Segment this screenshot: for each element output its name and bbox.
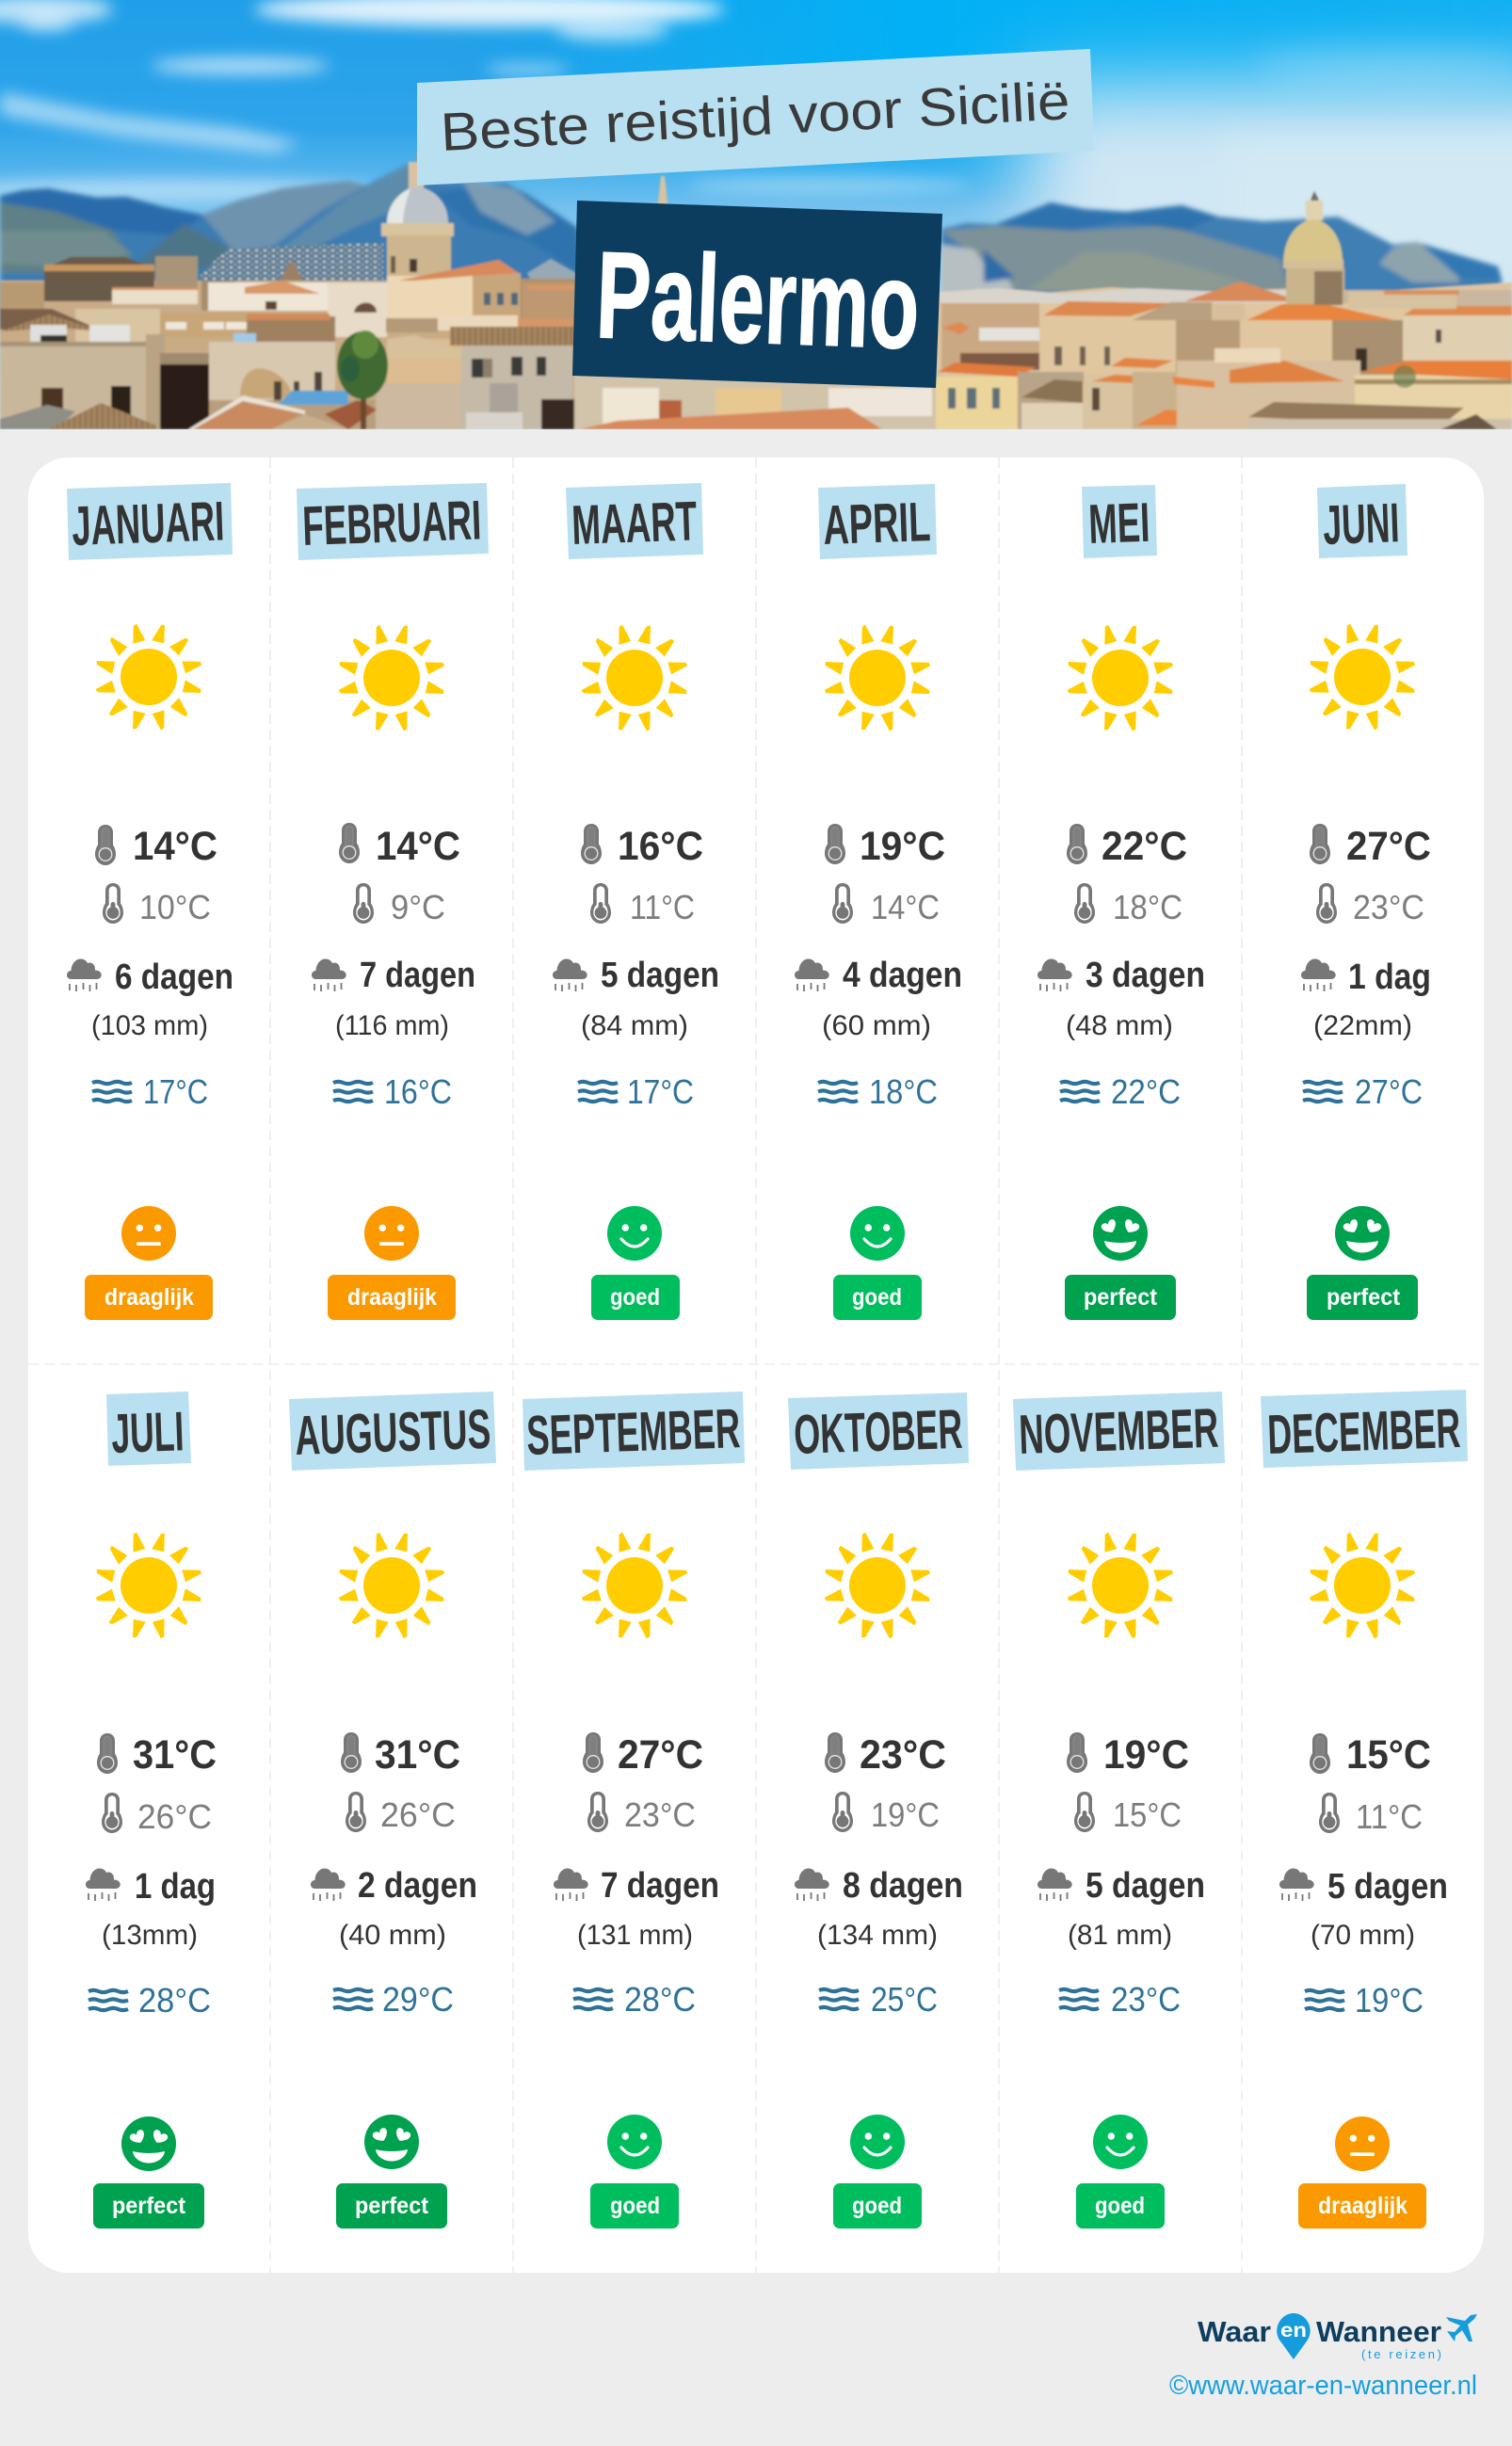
sea temperature: 23°C <box>1111 1980 1181 2019</box>
low temperature: 15°C <box>1113 1795 1182 1834</box>
high temperature: 15°C <box>1346 1732 1431 1778</box>
smiley: neutral <box>121 1206 176 1261</box>
low temperature <box>346 1792 456 1834</box>
low temperature <box>1074 1792 1182 1834</box>
low temperature <box>353 883 445 926</box>
left mountains <box>0 163 603 311</box>
right dome <box>1283 191 1344 305</box>
rain days: 8 dagen <box>843 1866 963 1906</box>
rating badge <box>833 1275 922 1320</box>
icon: sun <box>1068 1533 1173 1638</box>
month label: JUNI <box>1322 491 1400 556</box>
rainfall: (84 mm) <box>581 1010 688 1041</box>
icon: sun <box>1068 625 1173 731</box>
panel: september <box>523 1392 745 2229</box>
sky <box>0 0 1512 429</box>
sea temperature <box>1059 1980 1181 2019</box>
mountains and city <box>0 151 1512 429</box>
sea temperature <box>1305 1981 1424 2020</box>
rain days: 7 dagen <box>360 956 475 995</box>
rain days <box>311 1866 477 1906</box>
rain days: 2 dagen <box>358 1866 477 1906</box>
high temperature <box>825 824 945 869</box>
high temperature <box>1067 1732 1189 1778</box>
rainfall: (70 mm) <box>1311 1920 1415 1951</box>
rain days: 5 dagen <box>1086 1866 1205 1906</box>
icon: location pin <box>1277 2313 1311 2359</box>
rain days: 4 dagen <box>843 956 962 995</box>
icon: sun <box>582 1533 687 1638</box>
month label: AUGUSTUS <box>294 1398 491 1467</box>
month label: SEPTEMBER <box>525 1397 741 1467</box>
rating badge <box>1076 2183 1165 2229</box>
rain days <box>795 956 962 995</box>
low temperature <box>103 883 211 926</box>
rating badge: draaglijk <box>105 1284 194 1311</box>
logo: Waar en Wanneer: (te reizen) <box>1361 2347 1441 2361</box>
month label <box>1082 485 1157 558</box>
month label <box>788 1392 969 1470</box>
rating badge <box>93 2183 204 2229</box>
right main buildings <box>941 282 1411 384</box>
month label: JULI <box>110 1400 185 1465</box>
rain days <box>795 1866 963 1906</box>
high temperature: 16°C <box>618 824 703 869</box>
rain days <box>1301 957 1431 997</box>
high temperature: 22°C <box>1102 824 1187 869</box>
panel: juni <box>1301 484 1431 1320</box>
month label <box>289 1392 496 1471</box>
rainfall: (116 mm) <box>335 1010 449 1041</box>
smiley: perfect <box>121 2116 176 2171</box>
panel: juli <box>86 1392 217 2229</box>
month label <box>297 483 489 560</box>
month label <box>1013 1392 1225 1471</box>
rating badge: goed <box>610 1284 660 1311</box>
rain days <box>312 956 475 995</box>
rain days: 6 dagen <box>115 957 233 997</box>
rain days <box>553 956 719 995</box>
sea temperature: 25°C <box>871 1980 938 2019</box>
smiley: perfect <box>1093 1206 1148 1261</box>
rating badge: perfect <box>112 2193 186 2219</box>
high temperature: 14°C <box>133 824 217 869</box>
panel: maart <box>553 483 719 1320</box>
rain days <box>1279 1867 1448 1907</box>
sea temperature <box>92 1072 208 1111</box>
sea temperature: 17°C <box>143 1072 208 1111</box>
month label <box>67 483 233 560</box>
low temperature: 14°C <box>871 888 940 926</box>
month label <box>523 1392 745 1471</box>
rating badge: goed <box>1095 2193 1145 2219</box>
low temperature: 10°C <box>139 888 211 926</box>
background spire behind name plate <box>657 175 668 203</box>
high temperature: 19°C <box>860 824 945 869</box>
month label: MAART <box>571 490 698 556</box>
sea temperature: 28°C <box>138 1981 211 2020</box>
rating badge <box>833 2183 922 2229</box>
rainfall: (81 mm) <box>1068 1920 1172 1951</box>
high temperature: 23°C <box>860 1732 946 1778</box>
low temperature <box>590 883 695 926</box>
subtitle plate: Beste reistijd voor Sicilië <box>417 49 1094 185</box>
sea temperature: 27°C <box>1355 1072 1423 1111</box>
header photo: Palermo skyline <box>0 0 1512 429</box>
low temperature: 23°C <box>1353 888 1424 926</box>
rating badge <box>590 2183 679 2229</box>
high temperature <box>1310 1732 1431 1778</box>
smiley: neutral <box>1335 2116 1390 2171</box>
rain days: 5 dagen <box>1327 1867 1448 1907</box>
rain days: 1 dag <box>135 1867 216 1907</box>
sea temperature: 22°C <box>1111 1072 1181 1111</box>
high temperature: 27°C <box>618 1732 703 1778</box>
high temperature: 31°C <box>133 1732 217 1778</box>
title plate: Palermo: Palermo <box>594 225 922 375</box>
month label: NOVEMBER <box>1018 1397 1219 1466</box>
logo: Waar en Wanneer: Wanneer <box>1316 2315 1441 2348</box>
icon: sun <box>96 1533 201 1638</box>
rain days <box>67 957 233 997</box>
right mountains <box>941 202 1502 306</box>
sea temperature: 28°C <box>624 1980 696 2019</box>
left middle buildings <box>0 260 579 344</box>
month label: APRIL <box>822 491 931 556</box>
sea temperature <box>578 1072 694 1111</box>
high temperature: 14°C <box>376 824 460 869</box>
rating badge: perfect <box>1327 1284 1401 1311</box>
sea temperature <box>819 1980 938 2019</box>
left roofs in foreground <box>0 395 377 429</box>
low temperature: 26°C <box>380 1795 456 1834</box>
title plate: Palermo <box>572 201 942 388</box>
rating badge: perfect <box>355 2193 429 2219</box>
smiley: perfect <box>1335 1206 1390 1261</box>
low temperature: 23°C <box>624 1795 696 1834</box>
panel: februari <box>297 483 489 1320</box>
rainfall: (13mm) <box>102 1920 198 1951</box>
smiley: good <box>1093 2115 1148 2169</box>
icon: sun <box>1310 624 1415 730</box>
rating badge: goed <box>610 2193 660 2219</box>
right lower roofs and walls <box>936 290 1512 429</box>
icon: location pin: en <box>1280 2320 1307 2341</box>
rain days <box>86 1867 216 1907</box>
low temperature: 19°C <box>871 1795 940 1834</box>
rain days: 5 dagen <box>601 956 719 995</box>
panel: mei <box>1037 485 1205 1320</box>
sea temperature <box>818 1072 938 1111</box>
palm tree <box>337 330 388 429</box>
rating badge <box>85 1275 213 1320</box>
sea temperature: 29°C <box>382 1980 454 2019</box>
sea temperature: 17°C <box>627 1072 694 1111</box>
sea temperature <box>1303 1072 1423 1111</box>
high temperature <box>95 824 217 869</box>
rating badge: draaglijk <box>347 1284 437 1311</box>
panel: augustus <box>289 1392 496 2229</box>
rating badge: draaglijk <box>1318 2193 1407 2219</box>
month label: MEI <box>1087 491 1150 555</box>
rainfall: (48 mm) <box>1066 1010 1173 1041</box>
low temperature <box>587 1792 696 1834</box>
smiley: good <box>607 1206 662 1261</box>
center buildings <box>574 372 941 429</box>
low temperature <box>832 883 940 926</box>
high temperature <box>339 823 460 869</box>
high temperature <box>341 1732 460 1778</box>
rain days: 3 dagen <box>1086 956 1205 995</box>
sea temperature <box>1060 1072 1181 1111</box>
rain days: 7 dagen <box>601 1866 719 1906</box>
rainfall: (103 mm) <box>91 1010 208 1041</box>
month label <box>1317 484 1407 558</box>
rating badge <box>591 1275 680 1320</box>
panel: november <box>1013 1392 1225 2229</box>
icon: sun <box>825 1533 930 1638</box>
icon: sun <box>825 625 930 731</box>
panel: april <box>795 484 962 1320</box>
low temperature: 26°C <box>137 1797 212 1836</box>
low temperature <box>1074 883 1182 926</box>
panel: januari <box>67 483 233 1320</box>
rainfall: (40 mm) <box>339 1920 446 1951</box>
smiley: good <box>607 2115 662 2169</box>
logo: Waar en Wanneer: Waar <box>1198 2315 1271 2348</box>
low temperature: 11°C <box>630 888 695 926</box>
rain days: 1 dag <box>1348 957 1431 997</box>
high temperature <box>1067 824 1187 869</box>
low temperature <box>1319 1793 1423 1836</box>
smiley: good <box>850 2115 905 2169</box>
logo: Waar en Wanneer <box>1198 2313 1477 2361</box>
rating badge <box>336 2183 447 2229</box>
month label: FEBRUARI <box>301 489 482 557</box>
sea temperature <box>88 1981 211 2020</box>
sea temperature <box>333 1980 454 2019</box>
low temperature: 18°C <box>1113 888 1182 926</box>
rain days <box>554 1866 719 1906</box>
rating badge: goed <box>852 2193 902 2219</box>
left lower walls <box>0 327 577 429</box>
low temperature: 11°C <box>1356 1797 1423 1836</box>
rating badge <box>328 1275 456 1320</box>
icon: sun <box>339 1533 444 1638</box>
month label <box>818 484 937 559</box>
rainfall: (60 mm) <box>822 1010 931 1041</box>
month label: JANUARI <box>71 490 225 557</box>
rainfall: (131 mm) <box>577 1920 693 1951</box>
rainfall: (134 mm) <box>817 1920 938 1951</box>
website url: ©www.waar-en-wanneer.nl <box>1169 2371 1477 2401</box>
month label: OKTOBER <box>793 1398 963 1466</box>
rating badge <box>1065 1275 1176 1320</box>
high temperature <box>583 1732 703 1778</box>
panel: december <box>1261 1390 1468 2229</box>
high temperature: 19°C <box>1103 1732 1189 1778</box>
rating badge: perfect <box>1084 1284 1158 1311</box>
high temperature <box>825 1732 946 1778</box>
dome tower left <box>381 151 454 282</box>
month label <box>106 1392 191 1466</box>
rainfall: (22mm) <box>1313 1010 1412 1041</box>
sea temperature: 19°C <box>1355 1981 1424 2020</box>
low temperature <box>832 1792 940 1834</box>
high temperature <box>1310 824 1431 869</box>
clouds <box>0 0 1512 201</box>
rain days <box>1037 1866 1205 1906</box>
icon: sun <box>1310 1533 1415 1638</box>
panel: oktober <box>788 1392 969 2229</box>
sea temperature <box>333 1072 452 1111</box>
sea temperature: 18°C <box>869 1072 938 1111</box>
high temperature <box>97 1732 217 1778</box>
icon: airplane <box>1446 2314 1477 2341</box>
high temperature <box>581 824 703 869</box>
icon: sun <box>582 625 687 731</box>
smiley: neutral <box>364 1206 419 1261</box>
high temperature: 31°C <box>375 1732 460 1778</box>
icon: sun <box>339 625 444 731</box>
low temperature: 9°C <box>391 888 445 926</box>
far town strips <box>0 254 1512 401</box>
month label <box>566 483 703 559</box>
sea temperature: 16°C <box>384 1072 452 1111</box>
icon: sun <box>96 624 201 730</box>
high temperature: 27°C <box>1346 824 1431 869</box>
subtitle plate: Beste reistijd voor Sicilië: Beste reistijd voor Sicilië <box>439 71 1071 163</box>
smiley: perfect <box>364 2115 419 2169</box>
rain days <box>1037 956 1205 995</box>
sea temperature <box>573 1980 696 2019</box>
rating badge: goed <box>852 1284 902 1311</box>
smiley: good <box>850 1206 905 1261</box>
rating badge <box>1298 2183 1426 2229</box>
rating badge <box>1307 1275 1418 1320</box>
low temperature <box>1316 883 1424 926</box>
low temperature <box>102 1793 212 1836</box>
main card <box>28 458 1484 2273</box>
